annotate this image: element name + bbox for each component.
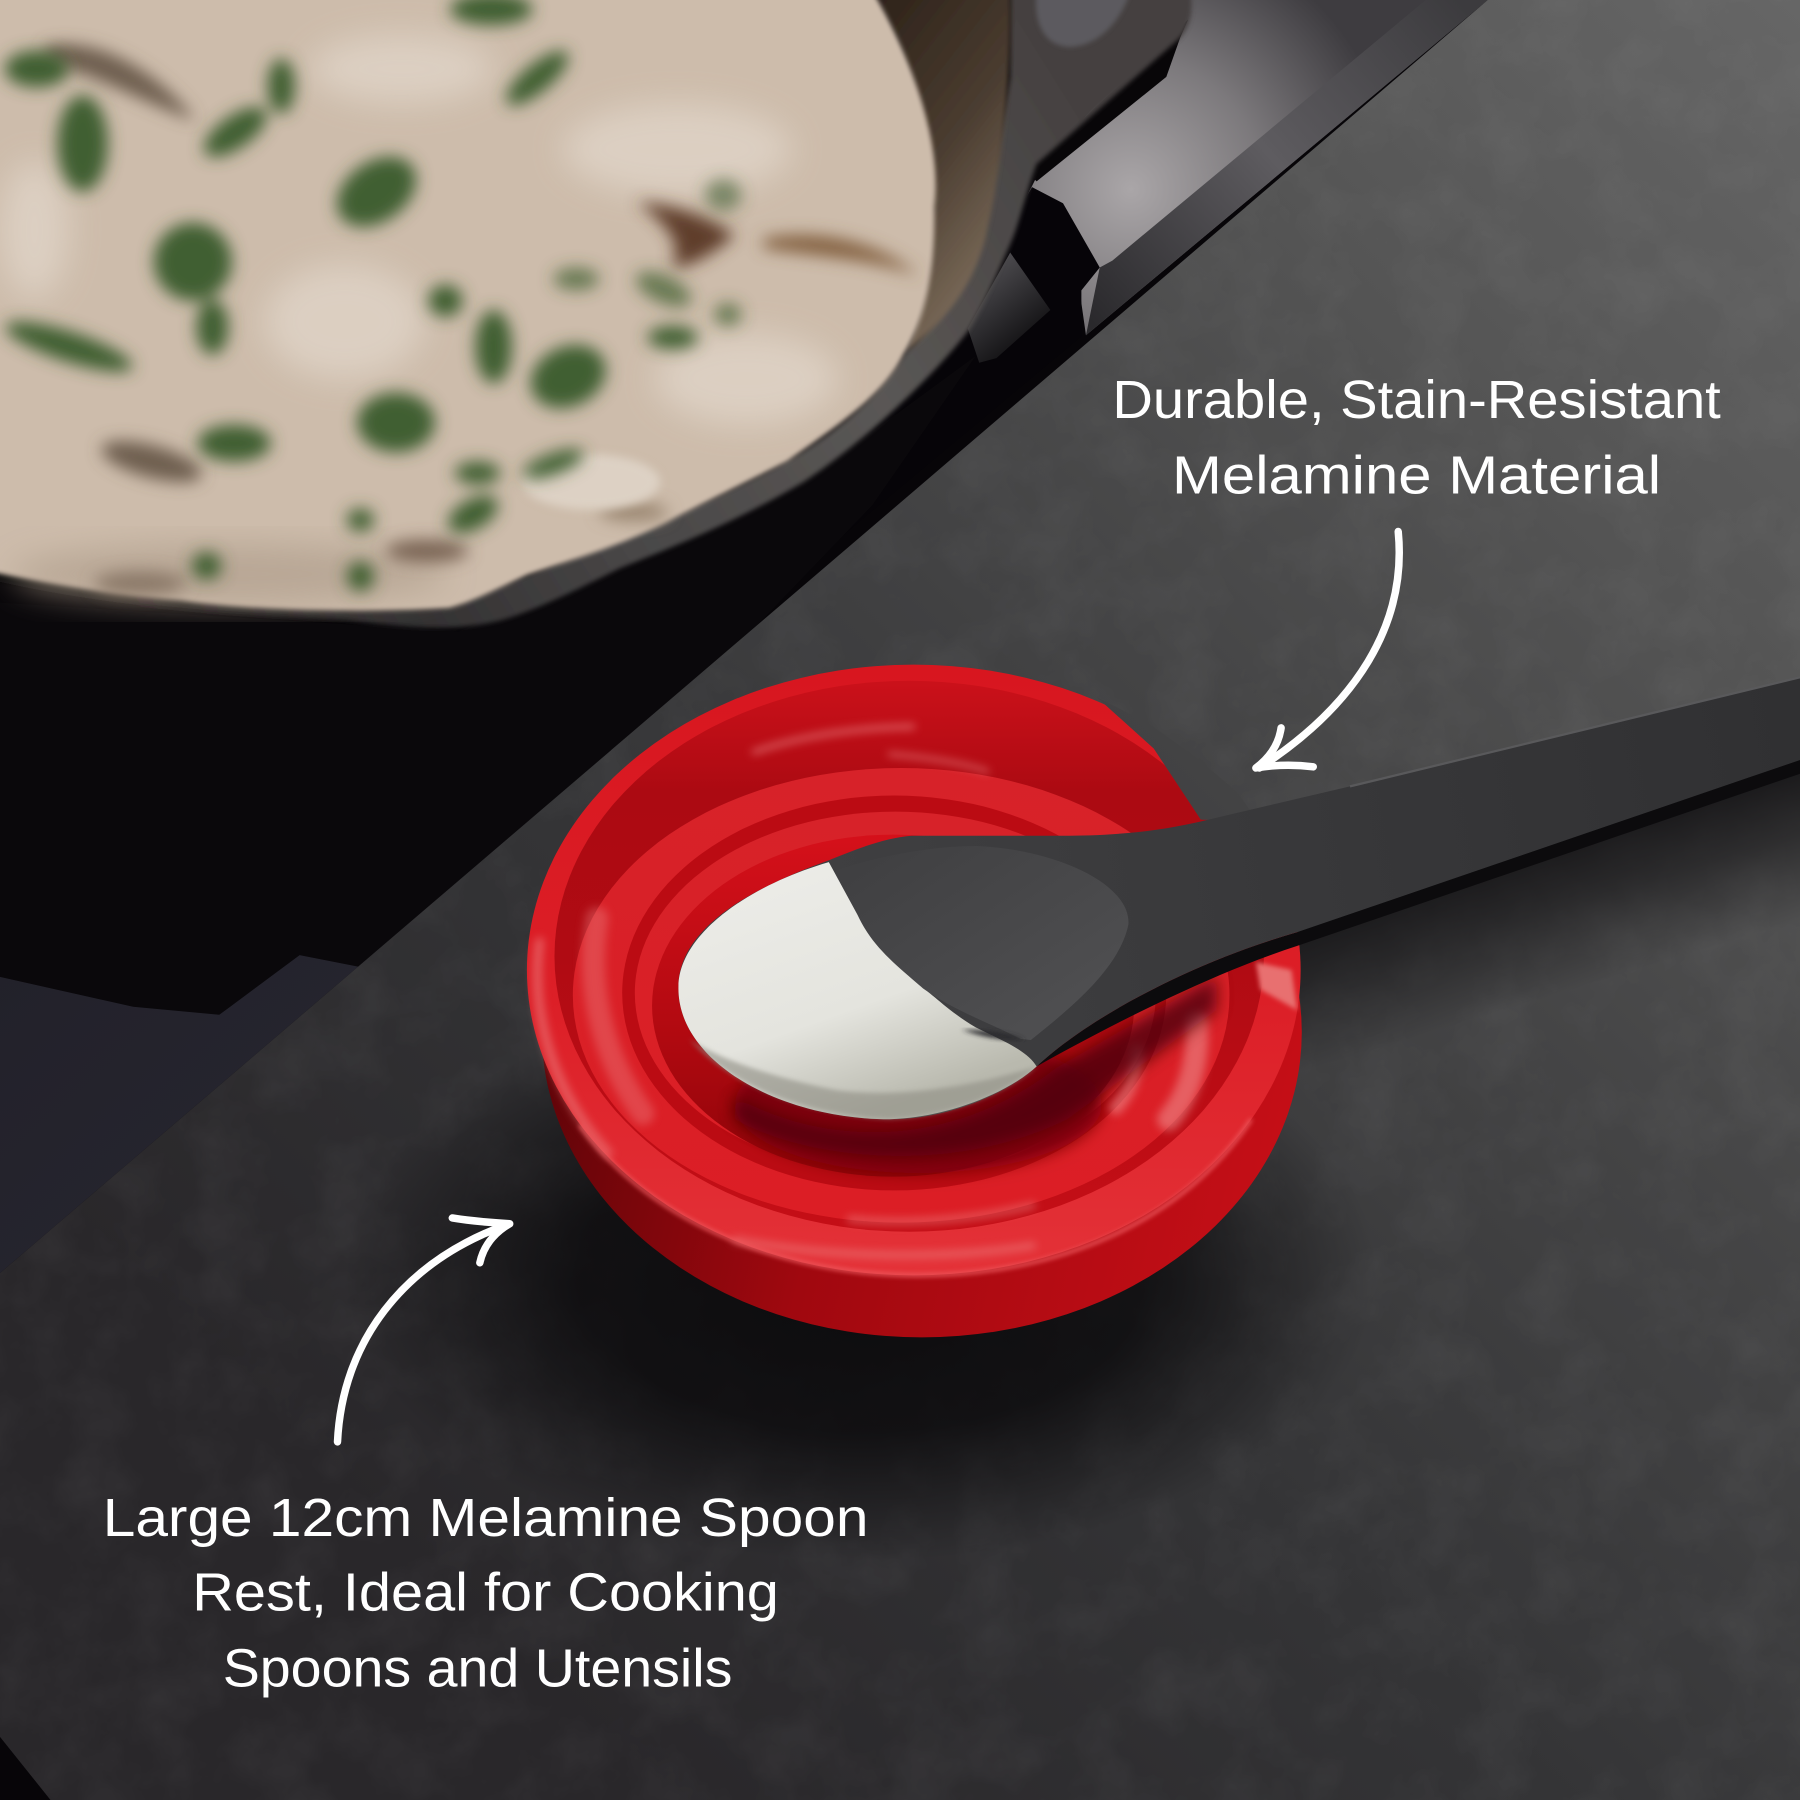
callout text: Durable, Stain-Resistant bbox=[1112, 370, 1721, 430]
spoon body bbox=[678, 677, 1800, 1119]
hob strip lower band bbox=[1086, 0, 1488, 335]
first raised ring bbox=[573, 768, 1229, 1223]
callout: large 12cm: Spoons and Utensils bbox=[223, 1638, 732, 1698]
black spatula spoon bbox=[678, 677, 1800, 1156]
red melamine spoon rest bbox=[527, 665, 1302, 1337]
arrow: to spoon rest bbox=[1256, 532, 1399, 768]
callout: durable material bbox=[1112, 370, 1721, 768]
callout: durable material: Melamine Material bbox=[1172, 446, 1661, 506]
handle underside bbox=[1037, 760, 1800, 1066]
sauce shadow lower bbox=[11, 544, 448, 604]
mushroom pieces bbox=[46, 44, 918, 595]
handle top edge highlight bbox=[1350, 677, 1800, 786]
inner wall bbox=[554, 681, 1264, 1232]
sauce highlights bbox=[0, 34, 838, 425]
lower-left hob strip bbox=[0, 955, 358, 1273]
dark smear at cream edge bbox=[962, 1030, 1025, 1040]
front rim edge highlight bbox=[580, 1119, 1251, 1275]
gloss highlights bbox=[537, 727, 1197, 1255]
callout: large 12cm: Rest, Ideal for Cooking bbox=[192, 1563, 779, 1623]
pan rim and handle bbox=[0, 0, 1192, 628]
herbs bbox=[1, 0, 742, 591]
glimpse through bracket bbox=[968, 253, 1050, 363]
dish shadow bbox=[406, 1090, 1332, 1528]
shadow of spoon rest and handle bbox=[344, 746, 1800, 1561]
second raised ring bbox=[635, 812, 1156, 1174]
callout: large 12cm bbox=[103, 1218, 868, 1698]
outer wall bbox=[542, 727, 1302, 1337]
cast iron pan bbox=[0, 0, 1192, 1015]
centre well bbox=[652, 835, 1134, 1177]
spoon bowl hollow bbox=[831, 846, 1128, 1040]
pan lower body bbox=[0, 356, 976, 1015]
spoon shadow on dish bbox=[735, 976, 1217, 1156]
cream on spoon bbox=[678, 862, 1037, 1119]
top rim bbox=[527, 665, 1301, 1275]
sauce bbox=[0, 0, 936, 611]
pan handle underside shadow bbox=[1027, 20, 1188, 181]
creamy mushroom food bbox=[0, 0, 936, 611]
grey hob strip behind the pan bbox=[1010, 0, 1488, 335]
spoon notch right bbox=[1256, 962, 1297, 1010]
handle hole bbox=[1036, 0, 1131, 47]
first groove bbox=[622, 796, 1166, 1190]
cream bottom shade bbox=[689, 1039, 1037, 1119]
black burner bracket bbox=[735, 187, 1100, 597]
callout text: Large 12cm Melamine Spoon bbox=[103, 1488, 868, 1548]
pan inner wall bbox=[870, 0, 1010, 351]
arrow: to spoon rest bbox=[338, 1218, 510, 1442]
deep well shade bbox=[735, 1035, 1102, 1173]
handle shadow bbox=[1298, 760, 1800, 1046]
pale mushroom slice bbox=[522, 455, 660, 510]
spoon notch top: board showing past the cut rim bbox=[1096, 697, 1258, 822]
